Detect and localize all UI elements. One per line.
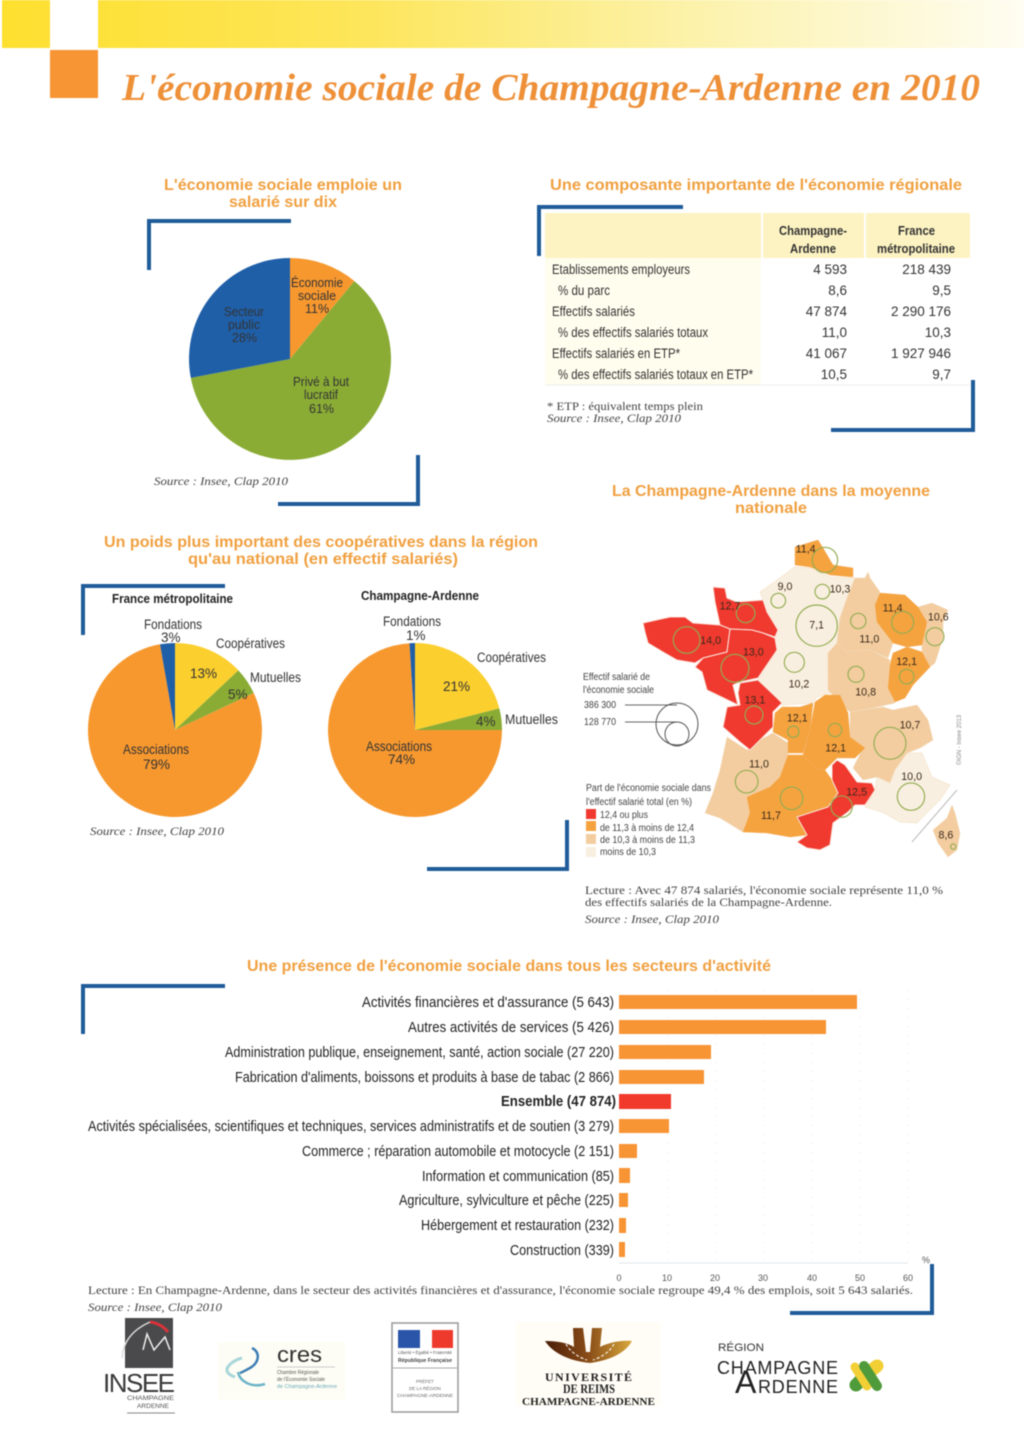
table rows: 218 439	[902, 262, 951, 277]
logo: INSEE	[103, 1318, 175, 1413]
logo: Région Champagne-Ardenne	[717, 1341, 877, 1400]
bar chart: Activités financières et d'assurance (5 643)	[362, 994, 614, 1011]
bar chart: Agriculture, sylviculture et pêche (225)	[399, 1192, 614, 1209]
table rows: % des effectifs salariés totaux en ETP*	[558, 367, 754, 382]
map of France: 10,7	[900, 719, 920, 731]
pie: France métropolitaine: 79%	[143, 757, 170, 772]
pie chart: public	[228, 318, 260, 332]
table header: Champagne-	[779, 224, 847, 238]
table header: Ardenne	[790, 242, 836, 256]
logo: Préfet de la région	[392, 1323, 458, 1412]
source: Source : Insee, Clap 2010	[154, 474, 288, 488]
map of France: 7,1	[809, 619, 824, 631]
bracket top-left	[83, 986, 225, 1034]
pie: Champagne-Ardenne: 21%	[443, 679, 470, 694]
logo: CRES: cres	[277, 1342, 322, 1367]
bar chart: Activités spécialisées, scientifiques et techniques, services administratifs et de soutien (3 279)	[88, 1118, 614, 1135]
logo: Région Champagne-Ardenne: A	[735, 1364, 757, 1400]
heading: moyenne nationale: La Champagne-Ardenne dans la moyenne	[612, 483, 930, 500]
heading: emploie un salarié sur dix: salarié sur dix	[229, 194, 337, 211]
heading: moyenne nationale: nationale	[735, 500, 807, 517]
pie: Champagne-Ardenne: Associations	[366, 739, 432, 754]
table rows: 9,7	[932, 367, 951, 382]
bracket bottom-right	[831, 380, 973, 430]
table header: métropolitaine	[877, 242, 955, 256]
table rows: % du parc	[558, 283, 610, 298]
pie chart: 11%	[305, 302, 329, 316]
colour legend: 12,4 ou plus	[600, 810, 648, 821]
table rows: 2 290 176	[891, 304, 951, 319]
table rows: 10,5	[821, 367, 847, 382]
table rows: 8,6	[828, 283, 847, 298]
size legend: l'économie sociale	[583, 685, 654, 696]
map of France: 11,0	[749, 758, 769, 770]
logo: Université de Reims: UNIVERSITÉ	[545, 1370, 632, 1384]
bracket bottom-right	[790, 1264, 932, 1313]
map reading note: Lecture : Avec 47 874 salariés, l'économie sociale représente 11,0 %	[585, 883, 943, 897]
source: Source : Insee, Clap 2010	[90, 824, 224, 838]
pie: Champagne-Ardenne	[328, 588, 558, 817]
map of France: 12,1	[825, 743, 846, 755]
logo: Préfet de la région: CHAMPAGNE-ARDENNE	[397, 1393, 453, 1398]
pie: France métropolitaine	[88, 591, 301, 817]
panel: coopératives pies	[83, 534, 567, 869]
logo: CRES: de l'Économie Sociale	[277, 1376, 325, 1383]
pie chart	[189, 258, 391, 460]
heading: poids des coopératives: qu'au national (en effectif salariés)	[188, 551, 458, 568]
table rows: 1 927 946	[891, 346, 951, 361]
bar chart: Hébergement et restauration (232)	[421, 1217, 614, 1234]
table rows: Effectifs salariés	[552, 304, 635, 319]
bar chart	[88, 990, 930, 1283]
logo: INSEE: ARDENNE	[137, 1404, 169, 1410]
map of France: 11,0	[859, 634, 879, 646]
panel: carte de France	[583, 483, 963, 926]
table rows: 41 067	[806, 346, 847, 361]
bracket bottom-right	[427, 820, 567, 869]
table rows: 9,5	[932, 283, 951, 298]
size legend: 386 300	[584, 700, 616, 711]
logo: INSEE: INSEE	[103, 1368, 175, 1398]
pie: France métropolitaine: Coopératives	[216, 636, 285, 651]
source: Source : Insee, Clap 2010	[585, 912, 719, 926]
map of France: 10,3	[830, 584, 850, 596]
heading: tous les secteurs: Une présence de l'économie sociale dans tous les secteurs d'activité	[247, 958, 771, 975]
pie chart: 61%	[309, 402, 334, 416]
bar chart: 30	[758, 1273, 768, 1283]
colour legend: moins de 10,3	[600, 847, 656, 858]
title: L'économie sociale de Champagne-Ardenne en 2010	[121, 67, 980, 109]
logo: Région Champagne-Ardenne: CHAMPAGNE	[717, 1358, 838, 1378]
pie chart: Secteur	[224, 305, 264, 319]
logo: CRES: Chambre Régionale	[277, 1370, 319, 1376]
logo: Préfet de la région: Liberté • Égalité • Fraternité	[398, 1349, 452, 1355]
table rows: 11,0	[822, 325, 847, 340]
map of France: 10,0	[901, 771, 922, 783]
source: Source : Insee, Clap 2010	[88, 1300, 222, 1314]
header band	[2, 0, 1024, 98]
bar chart: 40	[807, 1273, 817, 1283]
pie chart: sociale	[298, 289, 336, 303]
map of France: 12,5	[846, 787, 867, 799]
logo: Préfet de la région: PRÉFET	[416, 1378, 434, 1384]
pie chart: 28%	[232, 331, 257, 345]
map of France: 11,7	[761, 810, 781, 822]
chart reading note: Lecture : En Champagne-Ardenne, dans le secteur des activités financières et d'assurance, l'économie sociale regroupe 49,4 % des emplois, soit 5 643 salariés.	[88, 1283, 913, 1297]
size legend	[583, 672, 698, 746]
colour legend: l'effectif salarié total (en %)	[586, 797, 692, 808]
map of France	[643, 540, 960, 857]
bar chart: Commerce ; réparation automobile et motocycle (2 151)	[302, 1143, 614, 1160]
pie: Champagne-Ardenne: 74%	[388, 752, 415, 767]
panel: tableau composante régionale	[539, 177, 973, 430]
pie: France métropolitaine: Associations	[123, 742, 189, 757]
map reading note: des effectifs salariés de la Champagne-Ardenne.	[585, 895, 832, 909]
logo: INSEE: CHAMPAGNE	[127, 1396, 174, 1402]
table header: France	[898, 224, 935, 238]
bracket top-left	[149, 221, 291, 270]
map of France: 11,4	[796, 544, 816, 556]
colour legend: Part de l'économie sociale dans	[586, 783, 711, 794]
pie: Champagne-Ardenne: Mutuelles	[505, 712, 558, 727]
size legend: Effectif salarié de	[583, 672, 650, 683]
panel: pie salariés	[149, 177, 418, 504]
table rows: % des effectifs salariés totaux	[558, 325, 708, 340]
pie: Champagne-Ardenne: 4%	[476, 714, 496, 729]
bracket top-left	[539, 207, 683, 256]
colour legend: de 10,3 à moins de 11,3	[600, 835, 695, 846]
map of France: 14,0	[700, 635, 721, 647]
logo: Université de Reims	[516, 1322, 661, 1408]
map of France: 13,1	[745, 694, 765, 706]
bar chart: 0	[616, 1273, 622, 1283]
bar chart: Ensemble (47 874)	[501, 1093, 616, 1110]
table rows: 47 874	[806, 304, 847, 319]
pie: Champagne-Ardenne: Fondations	[383, 614, 441, 629]
pie: Champagne-Ardenne: Champagne-Ardenne	[361, 588, 479, 603]
table footnote: * ETP : équivalent temps plein	[547, 399, 703, 413]
colour legend: de 11,3 à moins de 12,4	[600, 823, 694, 834]
heading: composante importante: Une composante importante de l'économie régionale	[550, 177, 962, 194]
logo: CRES	[218, 1342, 345, 1400]
copyright: ©IGN - Insee 2013	[956, 714, 963, 765]
colour legend	[586, 783, 711, 858]
bar chart: Information et communication (85)	[422, 1168, 614, 1185]
pie: France métropolitaine: 3%	[161, 630, 181, 645]
map of France: 10,2	[789, 678, 809, 690]
map of France: 13,0	[743, 647, 764, 659]
table rows: 4 593	[813, 262, 847, 277]
pie chart: lucratif	[304, 388, 338, 402]
map of France: 8,6	[939, 829, 953, 841]
heading: poids des coopératives: Un poids plus important des coopératives dans la région	[104, 534, 538, 551]
map of France: 11,4	[883, 602, 903, 614]
table background	[545, 213, 970, 385]
bar chart: 60	[903, 1273, 913, 1283]
bracket top-left	[83, 586, 225, 635]
pie chart: Privé à but	[293, 375, 349, 389]
pie: France métropolitaine: Mutuelles	[250, 670, 301, 685]
table rows: 10,3	[925, 325, 951, 340]
pie: France métropolitaine: 5%	[228, 687, 248, 702]
bar chart: %	[922, 1255, 930, 1265]
table rows: Effectifs salariés en ETP*	[552, 346, 681, 361]
bar chart: Fabrication d'aliments, boissons et produits à base de tabac (2 866)	[235, 1069, 614, 1086]
map of France: 12,1	[896, 656, 917, 668]
map of France: 9,0	[778, 581, 792, 593]
map of France: 10,8	[855, 687, 876, 699]
table rows: Etablissements employeurs	[552, 262, 690, 277]
bar chart: Administration publique, enseignement, santé, action sociale (27 220)	[225, 1044, 614, 1061]
logo: Région Champagne-Ardenne: RDENNE	[758, 1377, 838, 1397]
logo: Université de Reims: CHAMPAGNE-ARDENNE	[522, 1396, 655, 1408]
bracket bottom-right	[278, 455, 418, 504]
pie: France métropolitaine: France métropolitaine	[112, 591, 233, 606]
panel: secteurs d'activité	[83, 958, 932, 1314]
map of France: 10,6	[928, 612, 949, 624]
pie: Champagne-Ardenne: Coopératives	[477, 650, 546, 665]
pie: France métropolitaine: 13%	[190, 666, 217, 681]
pie: France métropolitaine: Fondations	[144, 617, 202, 632]
table rows	[552, 262, 951, 382]
bar chart: 10	[662, 1273, 672, 1283]
size legend: 128 770	[584, 717, 616, 728]
logo: Préfet de la région: DE LA RÉGION	[409, 1385, 441, 1391]
bar chart: 20	[710, 1273, 720, 1283]
bar chart: Construction (339)	[510, 1242, 614, 1259]
bar chart: Autres activités de services (5 426)	[408, 1019, 614, 1036]
pie chart: Économie	[291, 275, 343, 290]
map of France: 12,7	[720, 600, 740, 612]
bar chart: 50	[855, 1273, 865, 1283]
logos row	[103, 1318, 877, 1413]
source: Source : Insee, Clap 2010	[547, 411, 681, 425]
logo: Université de Reims: DE REIMS	[563, 1381, 615, 1396]
logo: CRES: de Champagne-Ardenne	[277, 1384, 337, 1390]
logo: Région Champagne-Ardenne: RÉGION	[718, 1341, 764, 1354]
logo: Préfet de la région: République Française	[398, 1358, 452, 1364]
map of France: 12,1	[787, 713, 808, 725]
heading: emploie un salarié sur dix: L'économie sociale emploie un	[164, 177, 402, 194]
pie: Champagne-Ardenne: 1%	[406, 628, 426, 643]
